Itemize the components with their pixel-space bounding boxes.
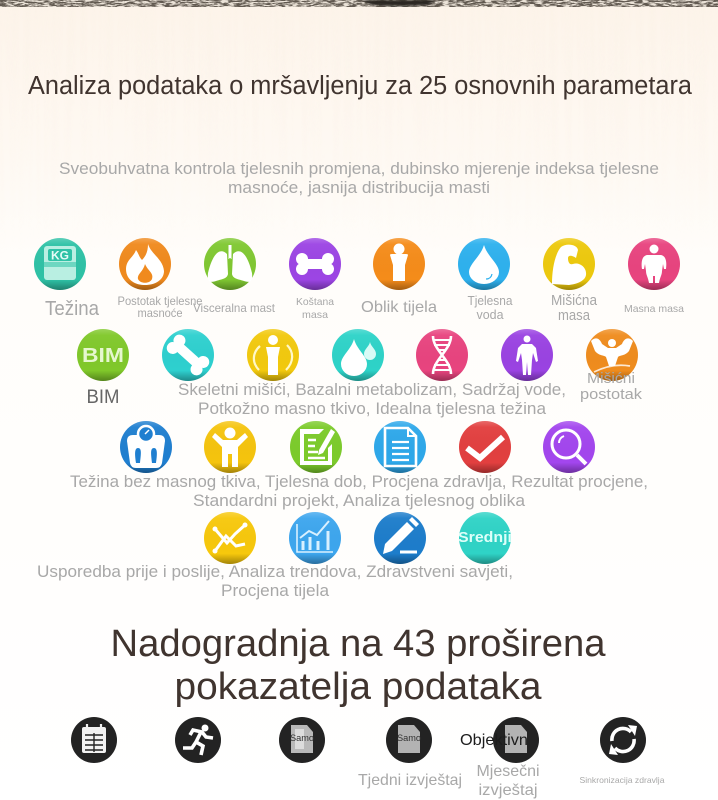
panel: row 1 icons xyxy=(34,238,680,290)
icon: check xyxy=(459,421,511,473)
text: row 3 parameters: Težina bez masnog tkiva, Tjelesna dob, Procjena zdravlja, Rezultat procjene, xyxy=(70,472,648,491)
text: row 2 parameters xyxy=(178,380,566,418)
labels: row 1: Oblik tijela xyxy=(361,299,437,316)
icon: lungs xyxy=(204,238,256,290)
top textured strip xyxy=(0,0,718,7)
label: objective: Objektivn xyxy=(460,732,528,749)
title: Analiza podataka o mršavljenju za 25 osnovnih parametara xyxy=(28,72,693,100)
icon: fat mass body xyxy=(628,238,680,290)
labels: row 1: Težina xyxy=(45,298,100,320)
label: monthly report: izvještaj xyxy=(478,782,538,799)
wood grain texture xyxy=(0,0,718,260)
label: BIM: BIM xyxy=(86,387,120,408)
label: monthly report xyxy=(476,763,540,799)
label: monthly report: Mjesečni xyxy=(476,763,540,780)
icon: water drop xyxy=(458,238,510,290)
icon: grey document B xyxy=(386,717,432,763)
icon: muscle percent xyxy=(586,329,638,381)
label: muscle percent xyxy=(580,370,643,403)
labels: row 1: Visceralna mast xyxy=(193,301,276,315)
icon: metabolism xyxy=(247,329,299,381)
heading: upgrade: pokazatelja podataka xyxy=(174,666,542,708)
panel: row 3 icons xyxy=(120,421,595,473)
labels: row 1: Postotak tjelesne xyxy=(118,294,203,308)
icon: health assessment xyxy=(290,421,342,473)
labels: row 1: Koštana xyxy=(296,296,334,308)
heading: upgrade xyxy=(110,623,606,708)
icon: scale with feet xyxy=(120,421,172,473)
icon: weight: KG xyxy=(51,248,69,262)
label: muscle percent: Mišićni xyxy=(587,370,635,387)
icon: grey document A: Samo xyxy=(290,733,314,743)
panel: dark icons xyxy=(71,717,646,763)
icon: grey document B: Samo xyxy=(397,733,421,743)
icon: medium xyxy=(458,512,512,564)
heading: upgrade: Nadogradnja na 43 proširena xyxy=(110,623,606,665)
label: muscle percent: postotak xyxy=(580,386,643,403)
labels: row 1: Masna masa xyxy=(624,303,684,315)
icon: biceps xyxy=(543,238,595,290)
text: row 3 parameters xyxy=(70,472,648,510)
panel: row 2 icons xyxy=(77,329,638,381)
icon: water drops xyxy=(332,329,384,381)
label: weekly report: Tjedni izvještaj xyxy=(358,772,462,789)
icon: body shape xyxy=(373,238,425,290)
text: row 4 parameters: Procjena tijela xyxy=(221,581,330,600)
icon: grey document A xyxy=(279,717,325,763)
text: row 4 parameters xyxy=(37,562,513,600)
icon: body age xyxy=(204,421,256,473)
subtitle xyxy=(59,159,659,197)
icon: sync xyxy=(600,717,646,763)
subtitle: masnoće, jasnija distribucija masti xyxy=(228,178,490,197)
labels: row 1: masa xyxy=(302,309,328,321)
icon: pencil xyxy=(374,512,426,564)
icon: human figure xyxy=(501,329,553,381)
icon: before and after xyxy=(204,512,256,564)
subtitle: Sveobuhvatna kontrola tjelesnih promjena, dubinsko mjerenje indeksa tjelesne xyxy=(59,159,659,178)
labels: row 1: masa xyxy=(558,308,591,324)
labels: row 1: masnoće xyxy=(138,306,183,320)
icon: bone teal xyxy=(162,329,214,381)
icon: trend chart xyxy=(289,512,341,564)
text: row 2 parameters: Potkožno masno tkivo, Idealna tjelesna težina xyxy=(198,399,547,418)
icon: runner xyxy=(175,717,221,763)
icon: grey document C xyxy=(493,717,539,763)
icon: DNA xyxy=(416,329,468,381)
icon: BIM: BIM xyxy=(82,345,124,367)
icon: medium: Srednji xyxy=(458,529,512,546)
text: row 4 parameters: Usporedba prije i poslije, Analiza trendova, Zdravstveni savjeti, xyxy=(37,562,513,581)
icon: bone purple xyxy=(289,238,341,290)
panel: row 4 icons xyxy=(204,512,512,564)
label: health sync: Sinkronizacija zdravlja xyxy=(580,775,665,785)
icon: flame xyxy=(119,238,171,290)
icon: weight xyxy=(34,238,86,290)
labels: row 1: Tjelesna xyxy=(468,293,513,308)
text: row 2 parameters: Skeletni mišići, Bazalni metabolizam, Sadržaj vode, xyxy=(178,380,566,399)
icon: BIM xyxy=(77,329,129,381)
icon: magnifier xyxy=(543,421,595,473)
text: row 3 parameters: Standardni projekt, Analiza tjelesnog oblika xyxy=(193,491,526,510)
labels: row 1 xyxy=(45,293,684,324)
labels: row 1: Mišićna xyxy=(551,293,598,309)
labels: row 1: voda xyxy=(476,307,504,322)
icon: calendar xyxy=(71,717,117,763)
icon: document xyxy=(374,421,426,473)
